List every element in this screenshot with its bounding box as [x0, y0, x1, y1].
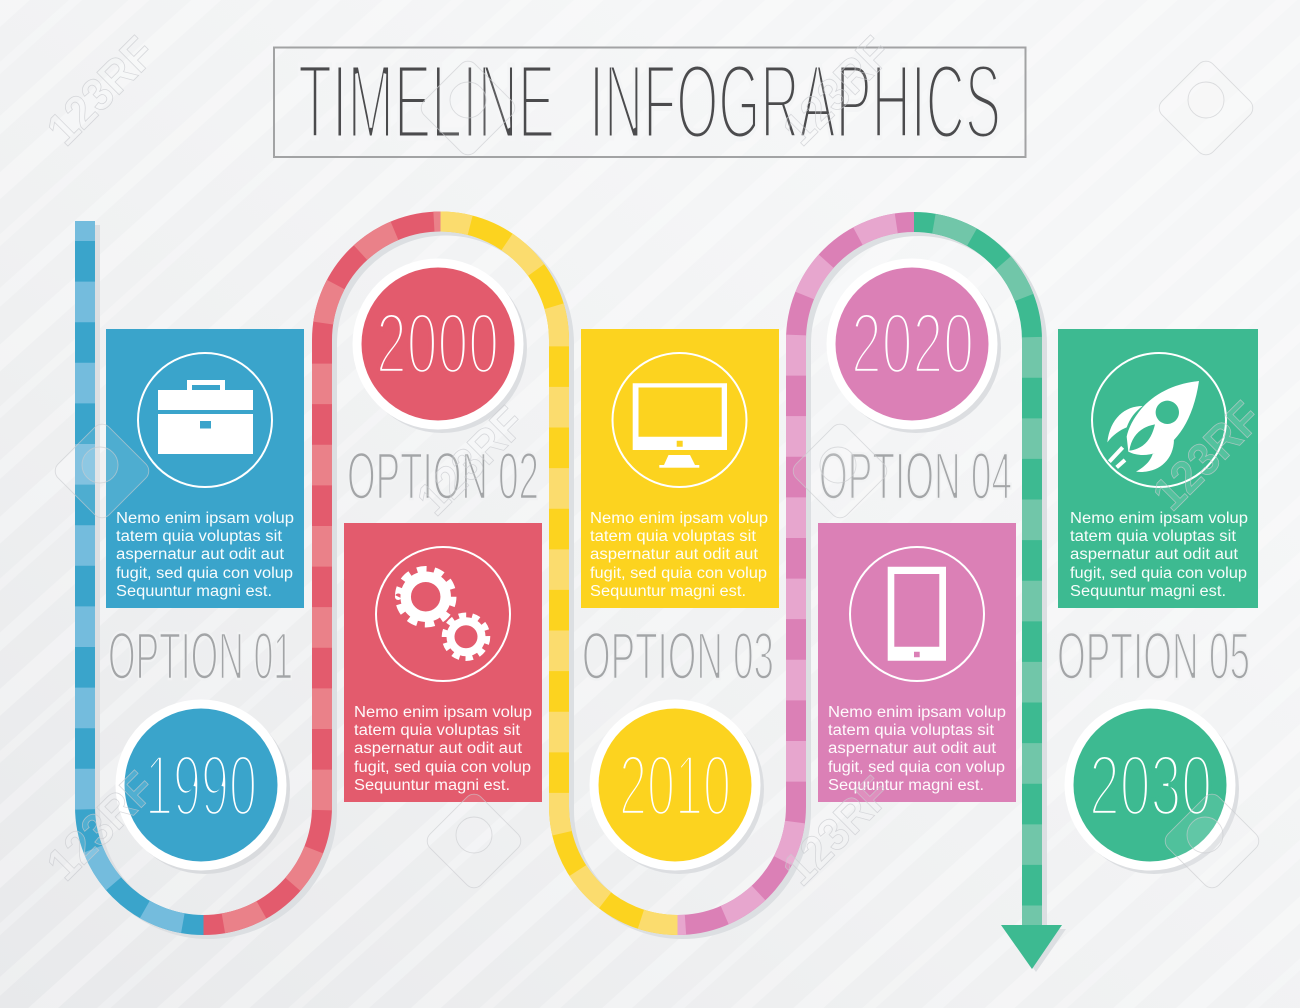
panel text: Sequuntur magni est.	[590, 583, 746, 600]
panel text: Nemo enim ipsam volup	[116, 510, 294, 527]
panel: option 04	[818, 523, 1016, 802]
icon: tablet	[850, 547, 984, 681]
title frame	[274, 48, 1026, 157]
option label 02: OPTION 02	[347, 439, 539, 514]
panel text: aspernatur aut odit aut	[828, 740, 997, 757]
panel text: aspernatur aut odit aut	[1070, 546, 1239, 563]
panel text: Sequuntur magni est.	[116, 583, 272, 600]
icon: monitor	[612, 353, 746, 487]
watermark overlay: 123RF	[36, 761, 165, 890]
title text	[298, 43, 1001, 161]
panel text	[354, 704, 532, 794]
icon: rocket	[1092, 353, 1226, 487]
panel text: aspernatur aut odit aut	[590, 546, 759, 563]
panel text: fugit, sed quia con volup	[354, 759, 531, 776]
icon: briefcase	[138, 353, 272, 487]
option label 03: OPTION 03	[582, 619, 774, 694]
panel text	[828, 704, 1006, 794]
panel text	[1070, 510, 1248, 600]
panel text: fugit, sed quia con volup	[1070, 565, 1247, 582]
watermark overlay: 123RF	[772, 26, 901, 155]
panel text: Nemo enim ipsam volup	[1070, 510, 1248, 527]
panel text: tatem quia voluptas sit	[116, 528, 283, 545]
ribbon shadow	[90, 225, 1037, 929]
year circle: 1990: 1990	[145, 738, 257, 834]
year circle: 2000: 2000	[376, 296, 499, 392]
panel text: Nemo enim ipsam volup	[354, 704, 532, 721]
ribbon segment: red	[204, 222, 440, 925]
ribbon segment: blue	[85, 221, 204, 925]
panel text: Nemo enim ipsam volup	[590, 510, 768, 527]
panel: option 03	[581, 329, 779, 608]
panel text: fugit, sed quia con volup	[590, 565, 767, 582]
watermark overlay: 123RF	[1142, 391, 1271, 520]
ribbon segment: yellow	[440, 222, 678, 925]
panel: option 05	[1058, 329, 1258, 608]
panel text: Sequuntur magni est.	[828, 777, 984, 794]
watermark overlay: 123RF	[36, 26, 165, 155]
panel text: aspernatur aut odit aut	[116, 546, 285, 563]
year circle: 2020	[826, 258, 1001, 433]
timeline ribbon	[85, 221, 1037, 929]
panel text: tatem quia voluptas sit	[590, 528, 757, 545]
title	[274, 43, 1026, 161]
year circle: 2030	[1064, 700, 1239, 874]
title text: TIMELINE	[298, 43, 555, 161]
ribbon segment: green	[914, 222, 1032, 926]
panel text: fugit, sed quia con volup	[828, 759, 1005, 776]
panel text: Sequuntur magni est.	[354, 777, 510, 794]
watermark overlay: 123RF	[772, 766, 901, 895]
panel: option 02	[344, 523, 542, 802]
panel text: tatem quia voluptas sit	[1070, 528, 1237, 545]
ribbon segment: pink	[678, 222, 914, 925]
year circle: 2000	[352, 258, 527, 433]
panel text: Nemo enim ipsam volup	[828, 704, 1006, 721]
panel: option 01	[106, 329, 304, 608]
year circle: 2010: 2010	[619, 738, 731, 834]
icon: gears	[376, 547, 510, 681]
panel text: tatem quia voluptas sit	[354, 722, 521, 739]
year circle: 2010	[590, 700, 764, 874]
panel text: aspernatur aut odit aut	[354, 740, 523, 757]
panel text: Sequuntur magni est.	[1070, 583, 1226, 600]
year circle: 2030: 2030	[1089, 738, 1212, 834]
panel text	[590, 510, 768, 600]
option label 04: OPTION 04	[819, 439, 1012, 514]
year circle: 1990	[116, 700, 290, 874]
panel text: tatem quia voluptas sit	[828, 722, 995, 739]
watermark overlay: 123RF	[406, 396, 535, 525]
arrow head	[1001, 925, 1066, 972]
year circle: 2020: 2020	[851, 296, 974, 392]
option label 01: OPTION 01	[108, 619, 293, 694]
panel text	[116, 510, 294, 600]
panel text: fugit, sed quia con volup	[116, 565, 293, 582]
